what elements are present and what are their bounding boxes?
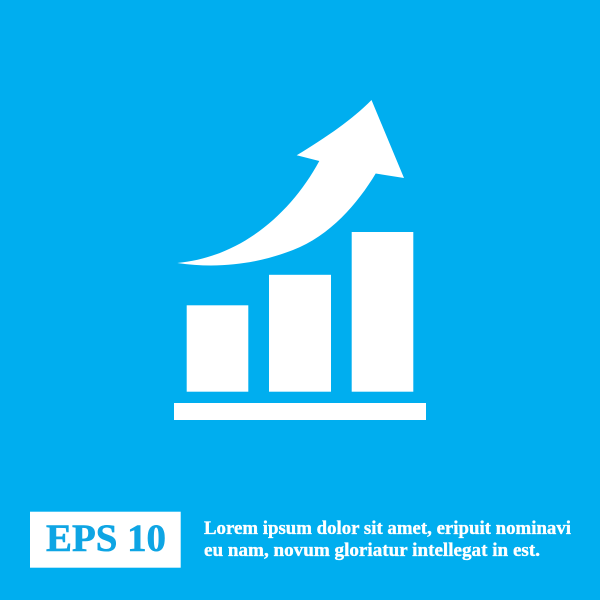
badge: EPS 10 bbox=[30, 512, 181, 568]
arrow: rising curve bbox=[177, 100, 404, 265]
chart baseline bbox=[174, 403, 426, 420]
bar: short bbox=[187, 305, 248, 392]
bar: tall bbox=[352, 232, 413, 392]
icon: growth chart bbox=[174, 100, 426, 420]
badge background bbox=[30, 512, 181, 568]
bar: medium bbox=[269, 275, 331, 392]
caption line 1: Lorem ipsum dolor sit amet, eripuit nominavi bbox=[204, 519, 571, 539]
caption text bbox=[204, 519, 571, 561]
badge label: EPS 10 bbox=[46, 517, 166, 560]
caption line 2: eu nam, novum gloriatur intellegat in est. bbox=[204, 541, 540, 561]
